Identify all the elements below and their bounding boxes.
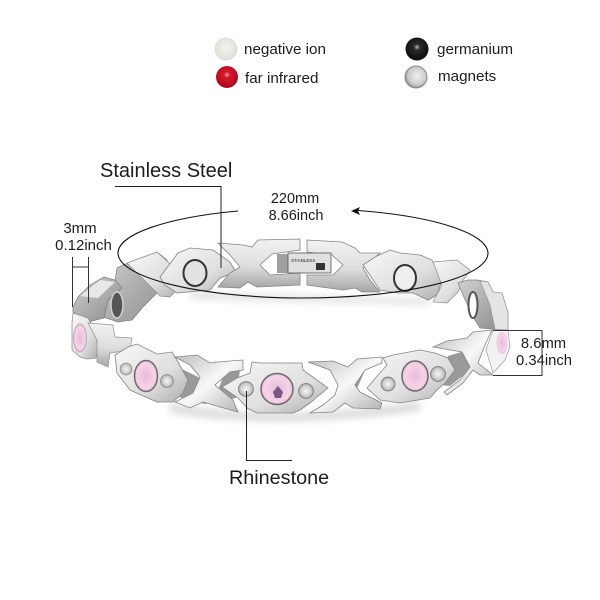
legend item: negative ion: negative ion [244,41,326,58]
front band: left X link [175,355,243,412]
legend item: magnets [405,66,497,88]
annotation: width 3mm: 3mm [63,220,97,237]
front band: far left jewel link [72,313,132,367]
annotation: width 3mm [55,220,112,307]
legend item: negative ion [214,38,326,60]
annotation: height 8.6mm: 8.6mm [521,336,566,352]
back band: left far links [73,252,182,322]
front band: right far X link [433,330,493,395]
back band: right magnet link [363,250,442,300]
gaps behind front links [175,350,470,404]
annotation: Rhinestone [229,391,329,489]
bracelet [72,239,510,421]
soft shadow under bracelet [170,293,430,421]
back band: right far links [433,260,508,330]
annotation: height 8.6mm: 0.34inch [516,353,572,369]
front band: left jewel link [115,344,188,402]
legend item: germanium [406,38,513,60]
annotation: height 8.6mm [493,330,572,376]
annotation: Stainless Steel: Stainless Steel [100,160,232,182]
clasp engraving: STAINLESS [291,258,315,263]
legend item: magnets: magnets [438,68,497,85]
back band: left magnet link [160,248,236,293]
front band: right X link [308,357,382,413]
annotation: circumference 220mm [118,191,488,298]
back band: clasp [218,239,380,292]
front band: far right jewel link [486,330,510,373]
annotation: width 3mm: 0.12inch [55,237,112,254]
legend item: germanium: germanium [437,41,513,58]
front band: right jewel link [367,350,455,403]
annotation: circumference 220mm: 8.66inch [269,208,323,224]
front band: center jewel link [222,362,328,413]
legend [214,38,513,88]
legend item: far infrared: far infrared [245,70,318,87]
legend item: far infrared [216,66,318,88]
annotation: Stainless Steel [100,160,232,268]
annotation: circumference 220mm: 220mm [271,191,319,207]
annotation: Rhinestone: Rhinestone [229,467,329,489]
